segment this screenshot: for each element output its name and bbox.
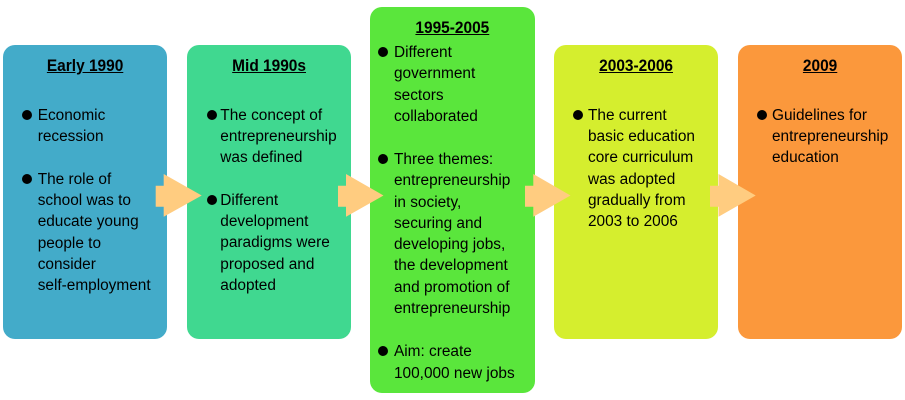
bullet: concept defined: The concept of	[220, 107, 322, 124]
bullet: guidelines	[757, 107, 888, 166]
heading: Early 1990: Early 1990	[46, 56, 123, 75]
bullet: concept defined: was defined	[220, 149, 302, 166]
bullet: three themes: securing and	[394, 215, 482, 232]
heading: 2009: 2009	[803, 56, 837, 75]
panel: 2009	[738, 45, 902, 339]
bullet: three themes: entrepreneurship	[394, 172, 510, 189]
panel: 2003-2006	[554, 45, 718, 339]
heading: Mid 1990s: Mid 1990s	[232, 56, 305, 75]
bullet: core curriculum: gradually from	[588, 192, 686, 209]
bullet: guidelines: entrepreneurship	[772, 128, 888, 145]
bullet: aim	[378, 343, 515, 382]
bullet: government sectors	[378, 44, 478, 125]
panel: 1995-2005	[370, 7, 535, 393]
bullet: three themes	[378, 151, 510, 317]
bullet: government sectors: Different	[394, 44, 452, 61]
bullet: core curriculum: was adopted	[588, 171, 675, 188]
bullet: three themes: and promotion of	[394, 279, 510, 296]
bullet: role of school: self-employment	[38, 277, 151, 294]
bullet: core curriculum	[573, 107, 695, 230]
bullet: development paradigms: Different	[220, 192, 278, 209]
bullet: guidelines: education	[772, 149, 839, 166]
arrow: Early 1990 to Mid 1990s	[156, 174, 202, 217]
bullet: development paradigms: adopted	[220, 277, 276, 294]
bullet: role of school: people to	[38, 235, 101, 252]
bullet: three themes: developing jobs,	[394, 236, 505, 253]
bullet: development paradigms: development	[220, 213, 308, 230]
heading: 1995-2005: 1995-2005	[416, 18, 490, 37]
bullet: government sectors: collaborated	[394, 108, 478, 125]
bullet: role of school	[22, 171, 151, 294]
bullet: three themes: Three themes:	[394, 151, 493, 168]
bullet: role of school: The role of	[38, 171, 111, 188]
bullet: concept defined: entrepreneurship	[220, 128, 337, 145]
bullet: core curriculum: 2003 to 2006	[588, 213, 678, 230]
bullet: guidelines: Guidelines for	[772, 107, 867, 124]
arrow: Mid 1990s to 1995-2005	[338, 174, 384, 217]
arrow: 1995-2005 to 2003-2006	[525, 174, 570, 217]
bullet: government sectors: sectors	[394, 87, 444, 104]
bullet: three themes: in society,	[394, 194, 461, 211]
heading: 2003-2006: 2003-2006	[599, 56, 673, 75]
bullet: core curriculum: The current	[588, 107, 667, 124]
bullet: development paradigms: paradigms were	[220, 234, 330, 251]
bullet: economic recession: recession	[38, 128, 104, 145]
bullet: core curriculum: core curriculum	[588, 149, 693, 166]
bullet: core curriculum: basic education	[588, 128, 695, 145]
bullet: role of school: consider	[38, 256, 96, 273]
bullet: aim: 100,000 new jobs	[394, 365, 515, 382]
bullet: economic recession	[22, 107, 105, 145]
panel: Early 1990	[2, 45, 167, 339]
bullet: concept defined	[207, 107, 337, 166]
bullet: economic recession: Economic	[38, 107, 105, 124]
arrow: 2003-2006 to 2009	[710, 174, 756, 217]
bullet: role of school: school was to	[38, 192, 131, 209]
bullet: role of school: educate young	[38, 213, 139, 230]
bullet: three themes: the development	[394, 257, 508, 274]
bullet: aim: Aim: create	[394, 343, 472, 360]
panel: Mid 1990s	[186, 45, 351, 339]
bullet: development paradigms: proposed and	[220, 256, 314, 273]
bullet: government sectors: government	[394, 65, 475, 82]
bullet: development paradigms	[207, 192, 330, 294]
bullet: three themes: entrepreneurship	[394, 300, 510, 317]
